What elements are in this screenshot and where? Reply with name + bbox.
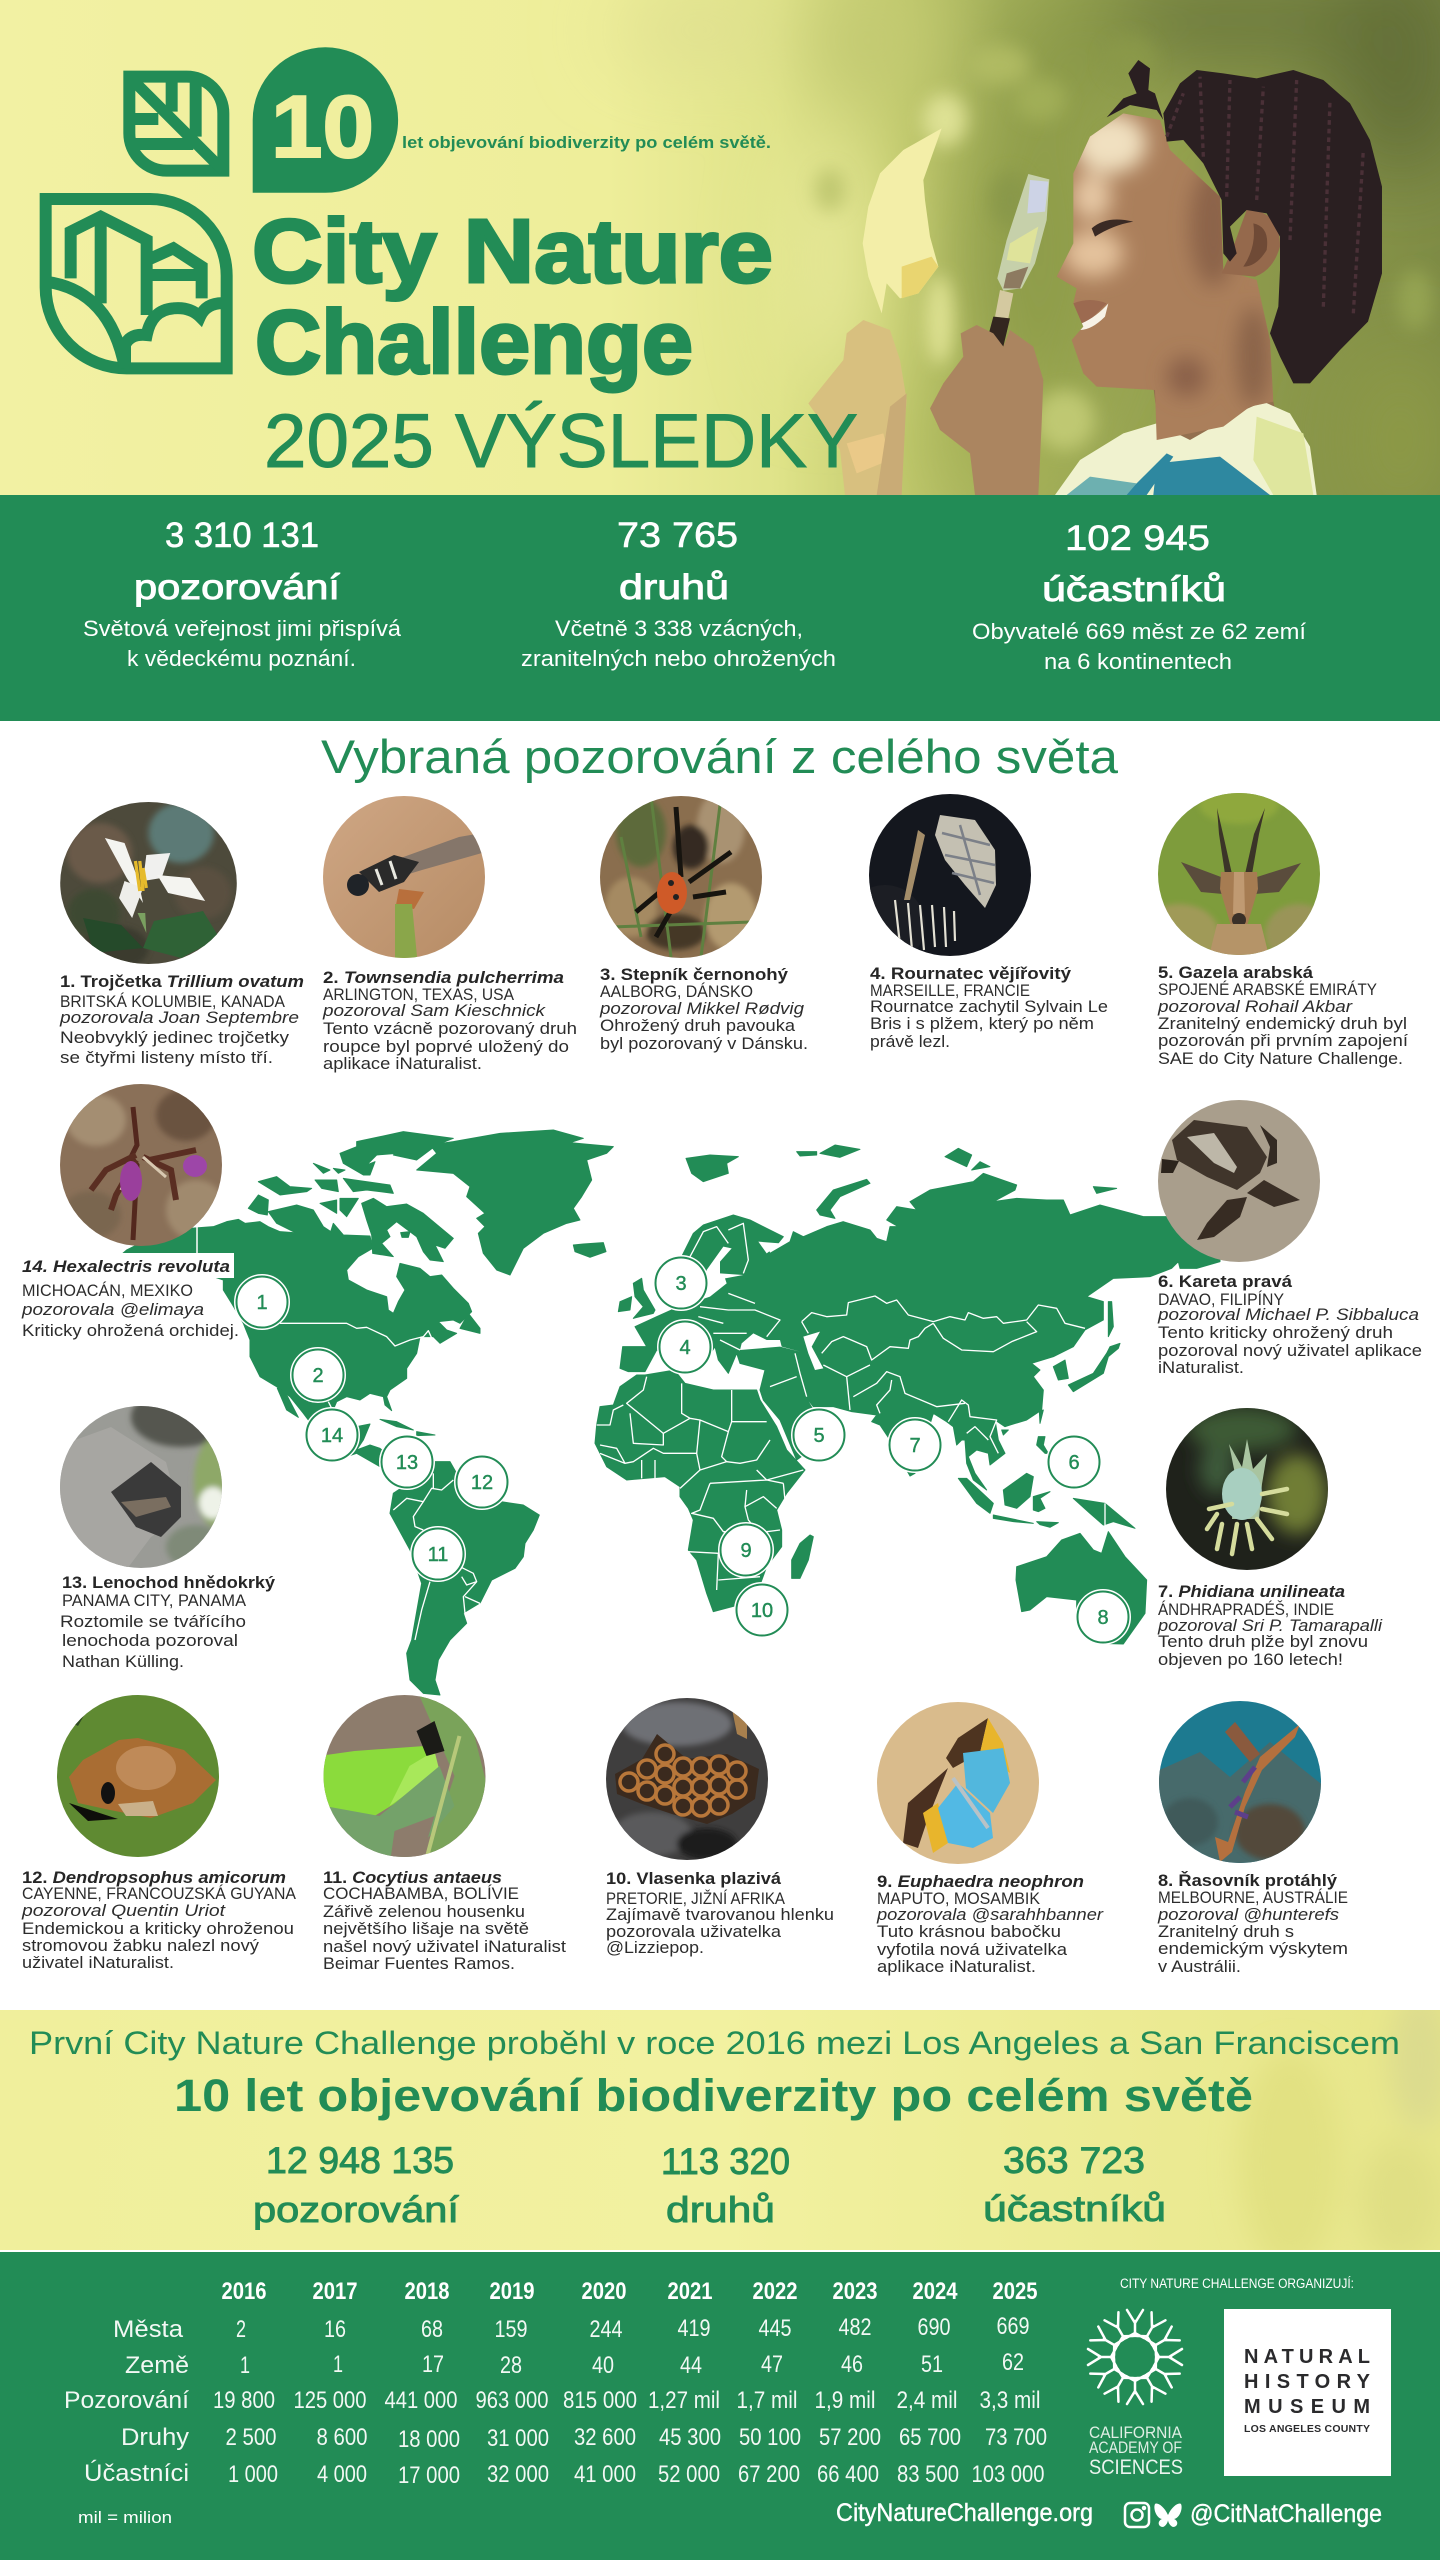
table header years: 2021 <box>668 2278 712 2305</box>
stat: species: 73 765 <box>617 516 738 555</box>
caption 4: právě lezl. <box>870 1032 950 1051</box>
caption 7: pozoroval Sri P. Tamarapalli <box>1157 1616 1383 1635</box>
logo: Natural History Museum <box>1224 2309 1391 2476</box>
heading: ten years: 10 let objevování biodiverzity po celém světě <box>174 2070 1253 2121</box>
logo: Natural History Museum: HISTORY <box>1244 2371 1371 2393</box>
marker 7: 7 <box>909 1435 921 1457</box>
logo wordmark: City Nature <box>252 202 773 302</box>
photo: sloth <box>51 1387 238 1577</box>
row: countries: 17 <box>422 2351 444 2378</box>
tagline: let objevování biodiverzity po celém světě. <box>402 133 771 152</box>
logo: California Academy of Sciences: CALIFORNIA <box>1089 2424 1182 2442</box>
caption 7: objeven po 160 letech! <box>1158 1650 1343 1669</box>
row: cities <box>113 2313 1030 2343</box>
caption 13: 13. Lenochod hnědokrký <box>62 1573 276 1592</box>
row: species <box>121 2424 1047 2453</box>
Arctic islands, Baffin, Baja, Caribbean <box>248 1132 480 1436</box>
stat: participants: 102 945 <box>1065 519 1210 558</box>
label background <box>20 1253 234 1278</box>
row: countries: 44 <box>680 2352 702 2379</box>
card 5: gazelle <box>1158 793 1408 1068</box>
caption 14: 14. Hexalectris revoluta <box>22 1257 230 1276</box>
caption 7: 7. Phidiana unilineata <box>1158 1582 1345 1601</box>
card 7: nudibranch <box>1157 1399 1383 1669</box>
photo: turtle hatchling <box>1149 1091 1329 1271</box>
Iceland <box>573 1243 606 1257</box>
caption 6: iNaturalist. <box>1158 1358 1244 1377</box>
logo: city icon <box>46 199 227 368</box>
stat: participants: na 6 kontinentech <box>1044 649 1232 674</box>
card 4: tube worm <box>869 794 1108 1050</box>
caption 6: pozoroval nový uživatel aplikace <box>1158 1341 1422 1360</box>
marker 3: 3 <box>675 1273 687 1295</box>
hero banner <box>0 0 1440 540</box>
card 14: orchid <box>20 1075 239 1340</box>
caption 4: MARSEILLE, FRANCIE <box>870 981 1030 1000</box>
logo: Natural History Museum: MUSEUM <box>1244 2396 1370 2418</box>
caption 10: PRETORIE, JIŽNÍ AFRIKA <box>606 1889 786 1908</box>
card 2: Townsendia fly <box>314 787 577 1073</box>
row: observations: 1,27 mil <box>648 2387 720 2414</box>
row: observations: 1,9 mil <box>814 2387 876 2414</box>
caption 11: našel nový uživatel iNaturalist <box>323 1937 566 1956</box>
logo: anniversary badge 10 <box>253 47 398 193</box>
caption 5: SPOJENÉ ARABSKÉ EMIRÁTY <box>1158 980 1377 999</box>
caption 1: se čtyřmi listeny místo tří. <box>60 1048 273 1067</box>
caption 12: uživatel iNaturalist. <box>22 1953 174 1972</box>
caption 11: 11. Cocytius antaeus <box>323 1868 502 1887</box>
row: participants: 52 000 <box>658 2461 720 2488</box>
caption 6: pozoroval Michael P. Sibbaluca <box>1157 1305 1419 1324</box>
photo: robber fly <box>323 796 485 958</box>
marker 5 <box>793 1409 845 1461</box>
caption 8: MELBOURNE, AUSTRÁLIE <box>1158 1888 1348 1907</box>
row: participants: 67 200 <box>738 2461 800 2488</box>
row: observations: 3,3 mil <box>980 2387 1040 2414</box>
caption 1: pozorovala Joan Septembre <box>59 1008 299 1027</box>
row: participants: 4 000 <box>317 2461 367 2488</box>
map markers <box>236 1257 1129 1643</box>
logo: Natural History Museum: NATURAL <box>1244 2346 1370 2368</box>
row: cities: 445 <box>758 2315 792 2342</box>
stat: observations <box>83 516 402 671</box>
caption 10: Zajímavě tvarovanou hlenku <box>606 1905 834 1924</box>
caption 2: roupce byl poprvé uložený do <box>323 1037 569 1056</box>
photo: weedy seadragon <box>1150 1692 1330 1872</box>
panel: 2025 totals <box>0 495 1440 721</box>
row: cities: 16 <box>324 2316 346 2343</box>
marker 5: 5 <box>813 1425 825 1447</box>
table header years: 2022 <box>752 2278 798 2305</box>
marker 2: 2 <box>312 1365 324 1387</box>
Africa <box>595 1370 805 1612</box>
row: cities: 419 <box>678 2315 710 2342</box>
stat: total observations: pozorování <box>253 2189 459 2230</box>
caption 1: 1. Trojčetka Trillium ovatum <box>60 972 304 991</box>
marker 6: 6 <box>1068 1452 1080 1474</box>
caption 14: pozorovala @elimaya <box>21 1300 204 1319</box>
row: cities: 68 <box>421 2316 443 2343</box>
row: species: 45 300 <box>659 2424 721 2451</box>
marker 13 <box>381 1436 433 1488</box>
row: countries: Země <box>125 2352 189 2379</box>
caption 5 <box>1157 963 1408 1068</box>
hair braids <box>1107 60 1382 383</box>
photo: Arabian gazelle <box>1139 784 1333 964</box>
caption 7 <box>1157 1582 1383 1669</box>
photo: child with magnifying glass <box>808 60 1382 495</box>
row: species: 2 500 <box>226 2424 276 2451</box>
logo: California Academy of Sciences <box>1088 2310 1183 2479</box>
row: cities: Města <box>113 2316 184 2343</box>
marker 8 <box>1077 1591 1129 1643</box>
row: species: 32 600 <box>574 2424 636 2451</box>
caption 6: Tento kriticky ohrožený druh <box>1158 1323 1393 1342</box>
caption 9: 9. Euphaedra neophron <box>877 1872 1084 1891</box>
card 3: spider <box>591 787 808 1053</box>
caption 3: AALBORG, DÁNSKO <box>600 982 753 1001</box>
logo wordmark: Challenge <box>255 293 693 393</box>
caption 6: 6. Kareta pravá <box>1158 1272 1293 1291</box>
leaf held up <box>863 128 942 313</box>
caption 2 <box>322 968 577 1073</box>
caption 7: ÁNDHRAPRADÉŠ, INDIE <box>1158 1600 1334 1619</box>
Eurasia <box>620 1173 1220 1490</box>
caption 3: byl pozorovaný v Dánsku. <box>600 1034 808 1053</box>
marker 12: 12 <box>471 1472 493 1494</box>
stat: observations: Světová veřejnost jimi přispívá <box>83 616 402 641</box>
row: countries: 28 <box>500 2352 522 2379</box>
caption 5: 5. Gazela arabská <box>1158 963 1314 982</box>
card 1: trillium <box>50 793 304 1067</box>
caption 11 <box>323 1868 566 1973</box>
row: observations: 2,4 mil <box>896 2387 958 2414</box>
Greenland <box>417 1130 613 1275</box>
icon: instagram <box>1125 2503 1149 2527</box>
row: cities: 669 <box>996 2313 1030 2340</box>
stat: total species: 113 320 <box>661 2141 790 2182</box>
marker 8: 8 <box>1097 1607 1109 1629</box>
caption 8 <box>1157 1871 1348 1976</box>
stat: total observations <box>253 2140 459 2230</box>
footnote: mil = milion <box>78 2508 172 2527</box>
card 11: caterpillar <box>314 1686 566 1973</box>
website: CityNatureChallenge.org <box>836 2499 1093 2527</box>
marker 1: 1 <box>256 1292 268 1314</box>
caption 10: 10. Vlasenka plazivá <box>606 1869 782 1888</box>
row: participants: 83 500 <box>897 2461 959 2488</box>
marker 4 <box>659 1321 711 1373</box>
stat: participants <box>972 519 1306 674</box>
stat: total participants <box>983 2140 1166 2229</box>
caption 4: Rournatce zachytil Sylvain Le <box>870 997 1108 1016</box>
stat: total participants: 363 723 <box>1003 2140 1145 2181</box>
photo: Phidiana nudibranch <box>1157 1399 1337 1579</box>
Seas cut out <box>700 1242 823 1370</box>
row: participants: 103 000 <box>972 2461 1044 2488</box>
caption 1: BRITSKÁ KOLUMBIE, KANADA <box>60 992 286 1011</box>
row: cities: 690 <box>918 2314 950 2341</box>
table: yearly statistics <box>64 2278 1047 2489</box>
heading: 2025 results: 2025 VÝSLEDKY <box>264 399 858 484</box>
row: participants: 17 000 <box>398 2462 460 2489</box>
stat: participants: Obyvatelé 669 měst ze 62 zemí <box>972 619 1306 644</box>
logo: leaf icon <box>129 77 223 171</box>
marker 10 <box>736 1584 788 1636</box>
caption 5: pozoroval Rohail Akbar <box>1157 997 1353 1016</box>
caption 12: CAYENNE, FRANCOUZSKÁ GUYANA <box>22 1884 297 1903</box>
table header years: 2025 <box>992 2278 1038 2305</box>
caption 12: Endemickou a kriticky ohroženou <box>22 1919 294 1938</box>
marker 14: 14 <box>321 1425 343 1447</box>
card 10: slime mold <box>597 1689 834 1957</box>
stat: total participants: účastníků <box>983 2188 1166 2229</box>
row: countries: 40 <box>592 2352 614 2379</box>
caption 13: Roztomile se tvářícího <box>60 1612 246 1631</box>
row: species: 73 700 <box>985 2424 1047 2451</box>
caption 13: lenochoda pozoroval <box>62 1631 238 1650</box>
row: observations: 1,7 mil <box>736 2387 798 2414</box>
caption 11: Zářivě zelenou housenku <box>323 1902 525 1921</box>
row: cities: 482 <box>838 2314 872 2341</box>
marker 11 <box>412 1528 464 1580</box>
caption 3: 3. Stepník černonohý <box>600 965 789 984</box>
social handle: @CitNatChallenge <box>1190 2500 1382 2528</box>
caption 4 <box>870 964 1108 1051</box>
marker 4: 4 <box>679 1337 691 1359</box>
table header years: 2018 <box>404 2278 450 2305</box>
table header years: 2016 <box>222 2278 266 2305</box>
marker 3 <box>655 1257 707 1309</box>
caption 1: Neobvyklý jedinec trojčetky <box>60 1028 290 1047</box>
marker 9 <box>720 1524 772 1576</box>
stat: observations: k vědeckému poznání. <box>127 646 356 671</box>
caption 10: @Lizziepop. <box>606 1938 704 1957</box>
logo: California Academy of Sciences: SCIENCES <box>1089 2456 1183 2479</box>
marker 2 <box>292 1349 344 1401</box>
icon: bluesky butterfly <box>1154 2503 1182 2527</box>
stat: total observations: 12 948 135 <box>266 2140 454 2181</box>
table header years: 2023 <box>832 2278 878 2305</box>
heading: selected observations: Vybraná pozorování z celého světa <box>321 730 1119 783</box>
table header years: 2019 <box>490 2278 534 2305</box>
row: species: 65 700 <box>899 2424 961 2451</box>
caption 4: 4. Rournatec vějířovitý <box>870 964 1072 983</box>
row: cities: 159 <box>494 2316 528 2343</box>
caption 1 <box>59 972 304 1067</box>
caption 14: MICHOACÁN, MEXIKO <box>22 1281 193 1300</box>
marker 9: 9 <box>740 1540 752 1562</box>
marker 14 <box>306 1409 358 1461</box>
caption 2: 2. Townsendia pulcherrima <box>323 968 564 987</box>
row: participants: 66 400 <box>817 2461 879 2488</box>
row: countries: 62 <box>1002 2349 1024 2376</box>
row: species: Druhy <box>121 2424 189 2451</box>
row: species: 57 200 <box>819 2424 881 2451</box>
row: observations: 441 000 <box>384 2387 458 2414</box>
caption 14 <box>20 1253 239 1340</box>
row: species: 31 000 <box>487 2425 549 2452</box>
marker 1 <box>236 1276 288 1328</box>
marker 12 <box>456 1456 508 1508</box>
row: observations: 815 000 <box>563 2387 637 2414</box>
row: participants: 32 000 <box>487 2461 549 2488</box>
caption 8: pozoroval @hunterefs <box>1157 1905 1340 1924</box>
caption 4: Bris i s plžem, který po něm <box>870 1014 1094 1033</box>
row: cities: 2 <box>236 2316 246 2343</box>
photo: trillium <box>60 802 237 964</box>
stat: total species: druhů <box>666 2189 775 2230</box>
map: Eurasia, Africa, Oceania <box>595 1145 1220 1644</box>
caption 11: největšího lišaje na světě <box>323 1919 529 1938</box>
row: participants: 1 000 <box>228 2461 278 2488</box>
logo: Natural History Museum: LOS ANGELES COUNTY <box>1244 2423 1370 2435</box>
marker 11: 11 <box>428 1544 448 1566</box>
ear <box>1222 210 1280 277</box>
caption 9: vyfotila nová uživatelka <box>877 1940 1068 1959</box>
photo: net slime mold <box>597 1689 777 1869</box>
caption 14: Kriticky ohrožená orchidej. <box>22 1321 239 1340</box>
caption 5: Zranitelný endemický druh byl <box>1158 1014 1407 1033</box>
organisers label: CITY NATURE CHALLENGE ORGANIZUJÍ: <box>1120 2276 1354 2291</box>
Alaska border line <box>196 1224 198 1254</box>
face <box>1050 107 1283 440</box>
table header years: 2024 <box>912 2278 958 2305</box>
caption 12 <box>21 1868 297 1972</box>
card 13: sloth <box>51 1387 276 1671</box>
islands <box>618 1145 1147 1644</box>
caption 11: Beimar Fuentes Ramos. <box>323 1954 515 1973</box>
left hand <box>808 320 907 495</box>
photo: hawkmoth caterpillar <box>314 1686 494 1866</box>
stat: total species <box>661 2141 790 2230</box>
logo: California Academy of Sciences: ACADEMY OF <box>1089 2439 1182 2457</box>
caption 5: SAE do City Nature Challenge. <box>1158 1049 1403 1068</box>
marker 13: 13 <box>396 1452 418 1474</box>
caption 10: pozorovala uživatelka <box>606 1922 782 1941</box>
caption 8: v Austrálii. <box>1158 1957 1241 1976</box>
caption 8: endemickým výskytem <box>1158 1939 1348 1958</box>
caption 12: pozoroval Quentin Uriot <box>21 1901 226 1920</box>
caption 13 <box>60 1573 276 1671</box>
card 6: sea turtle <box>1149 1091 1422 1377</box>
stat: observations: pozorování <box>134 568 340 607</box>
row: observations: 19 800 <box>213 2387 275 2414</box>
caption 6 <box>1157 1272 1422 1377</box>
stat: species: zranitelných nebo ohrožených <box>521 646 836 671</box>
caption 8: Zranitelný druh s <box>1158 1922 1294 1941</box>
right hand <box>930 325 1043 495</box>
row: cities: 244 <box>590 2316 622 2343</box>
neck and shirt <box>1055 387 1317 495</box>
row: participants: Účastníci <box>84 2460 189 2487</box>
stat: species <box>521 516 836 671</box>
row: observations: 963 000 <box>476 2387 548 2414</box>
card 9: butterfly <box>868 1693 1104 1976</box>
caption 10 <box>606 1869 834 1957</box>
photo: orchid <box>51 1075 231 1255</box>
row: species: 50 100 <box>739 2424 801 2451</box>
logo: anniversary badge 10: 10 <box>271 77 374 176</box>
row: species: 18 000 <box>398 2426 460 2453</box>
row: participants <box>84 2460 1044 2489</box>
row: countries: 1 <box>240 2352 250 2379</box>
marker 10: 10 <box>751 1600 773 1622</box>
row: observations <box>64 2387 1040 2414</box>
stat: species: druhů <box>619 568 729 607</box>
photo: Euphaedra butterfly <box>868 1693 1048 1873</box>
photo: fan worm <box>869 794 1031 956</box>
row: countries: 51 <box>921 2351 943 2378</box>
caption 9: MAPUTO, MOSAMBIK <box>877 1889 1041 1908</box>
card 8: sea dragon <box>1150 1692 1348 1976</box>
caption 2: Tento vzácně pozorovaný druh <box>323 1019 577 1038</box>
stat: species: Včetně 3 338 vzácných, <box>555 616 803 641</box>
heading: first challenge: První City Nature Challenge proběhl v roce 2016 mezi Los Angeles a San Franciscem <box>29 2025 1400 2061</box>
panel: ten years of discovery <box>0 1990 1440 2270</box>
card 12: frog <box>21 1686 297 1972</box>
magnifying glass <box>989 174 1049 347</box>
row: observations: Pozorování <box>64 2387 189 2414</box>
marker 6 <box>1048 1436 1100 1488</box>
caption 13: Nathan Külling. <box>62 1652 184 1671</box>
panel: yearly table and organisers <box>0 2252 1440 2560</box>
table header years: 2017 <box>312 2278 358 2305</box>
caption 9: pozorovala @sarahhbanner <box>876 1905 1104 1924</box>
caption 12: stromovou žabku nalezl nový <box>22 1936 260 1955</box>
caption 6: DAVAO, FILIPÍNY <box>1158 1290 1284 1309</box>
world map <box>115 1130 1220 1695</box>
table header years <box>222 2278 1038 2305</box>
Foxe Basin <box>401 1232 410 1237</box>
row: observations: 125 000 <box>294 2387 366 2414</box>
caption 3: Ohrožený druh pavouka <box>600 1016 796 1035</box>
caption 8: 8. Řasovník protáhlý <box>1158 1871 1338 1890</box>
row: countries: 46 <box>841 2351 863 2378</box>
caption 11: COCHABAMBA, BOLÍVIE <box>323 1884 519 1903</box>
row: countries: 47 <box>761 2351 783 2378</box>
photo: ladybird spider <box>600 796 762 958</box>
caption 9: aplikace iNaturalist. <box>877 1957 1036 1976</box>
caption 7: Tento druh plže byl znovu <box>1158 1632 1368 1651</box>
caption 2: ARLINGTON, TEXAS, USA <box>323 985 515 1004</box>
caption 9: Tuto krásnou babočku <box>877 1922 1061 1941</box>
stat: observations: 3 310 131 <box>165 516 319 555</box>
map: Americas, Greenland, Iceland <box>115 1130 613 1695</box>
row: countries <box>125 2349 1024 2379</box>
stat: participants: účastníků <box>1042 570 1226 609</box>
caption 2: pozoroval Sam Kieschnick <box>322 1001 547 1020</box>
row: countries: 1 <box>333 2351 343 2378</box>
photo: tree frog <box>48 1686 228 1866</box>
logo wordmark <box>252 202 773 393</box>
row: species: 8 600 <box>316 2424 368 2451</box>
row: participants: 41 000 <box>574 2461 636 2488</box>
caption 3: pozoroval Mikkel Rødvig <box>599 999 805 1018</box>
marker 7 <box>889 1419 941 1471</box>
caption 12: 12. Dendropsophus amicorum <box>22 1868 286 1887</box>
table header years: 2020 <box>582 2278 626 2305</box>
caption 3 <box>599 965 808 1053</box>
caption 5: pozorován při prvním zapojení <box>1158 1031 1408 1050</box>
caption 13: PANAMA CITY, PANAMA <box>62 1591 247 1610</box>
caption 2: aplikace iNaturalist. <box>323 1054 482 1073</box>
caption 9 <box>876 1872 1104 1976</box>
